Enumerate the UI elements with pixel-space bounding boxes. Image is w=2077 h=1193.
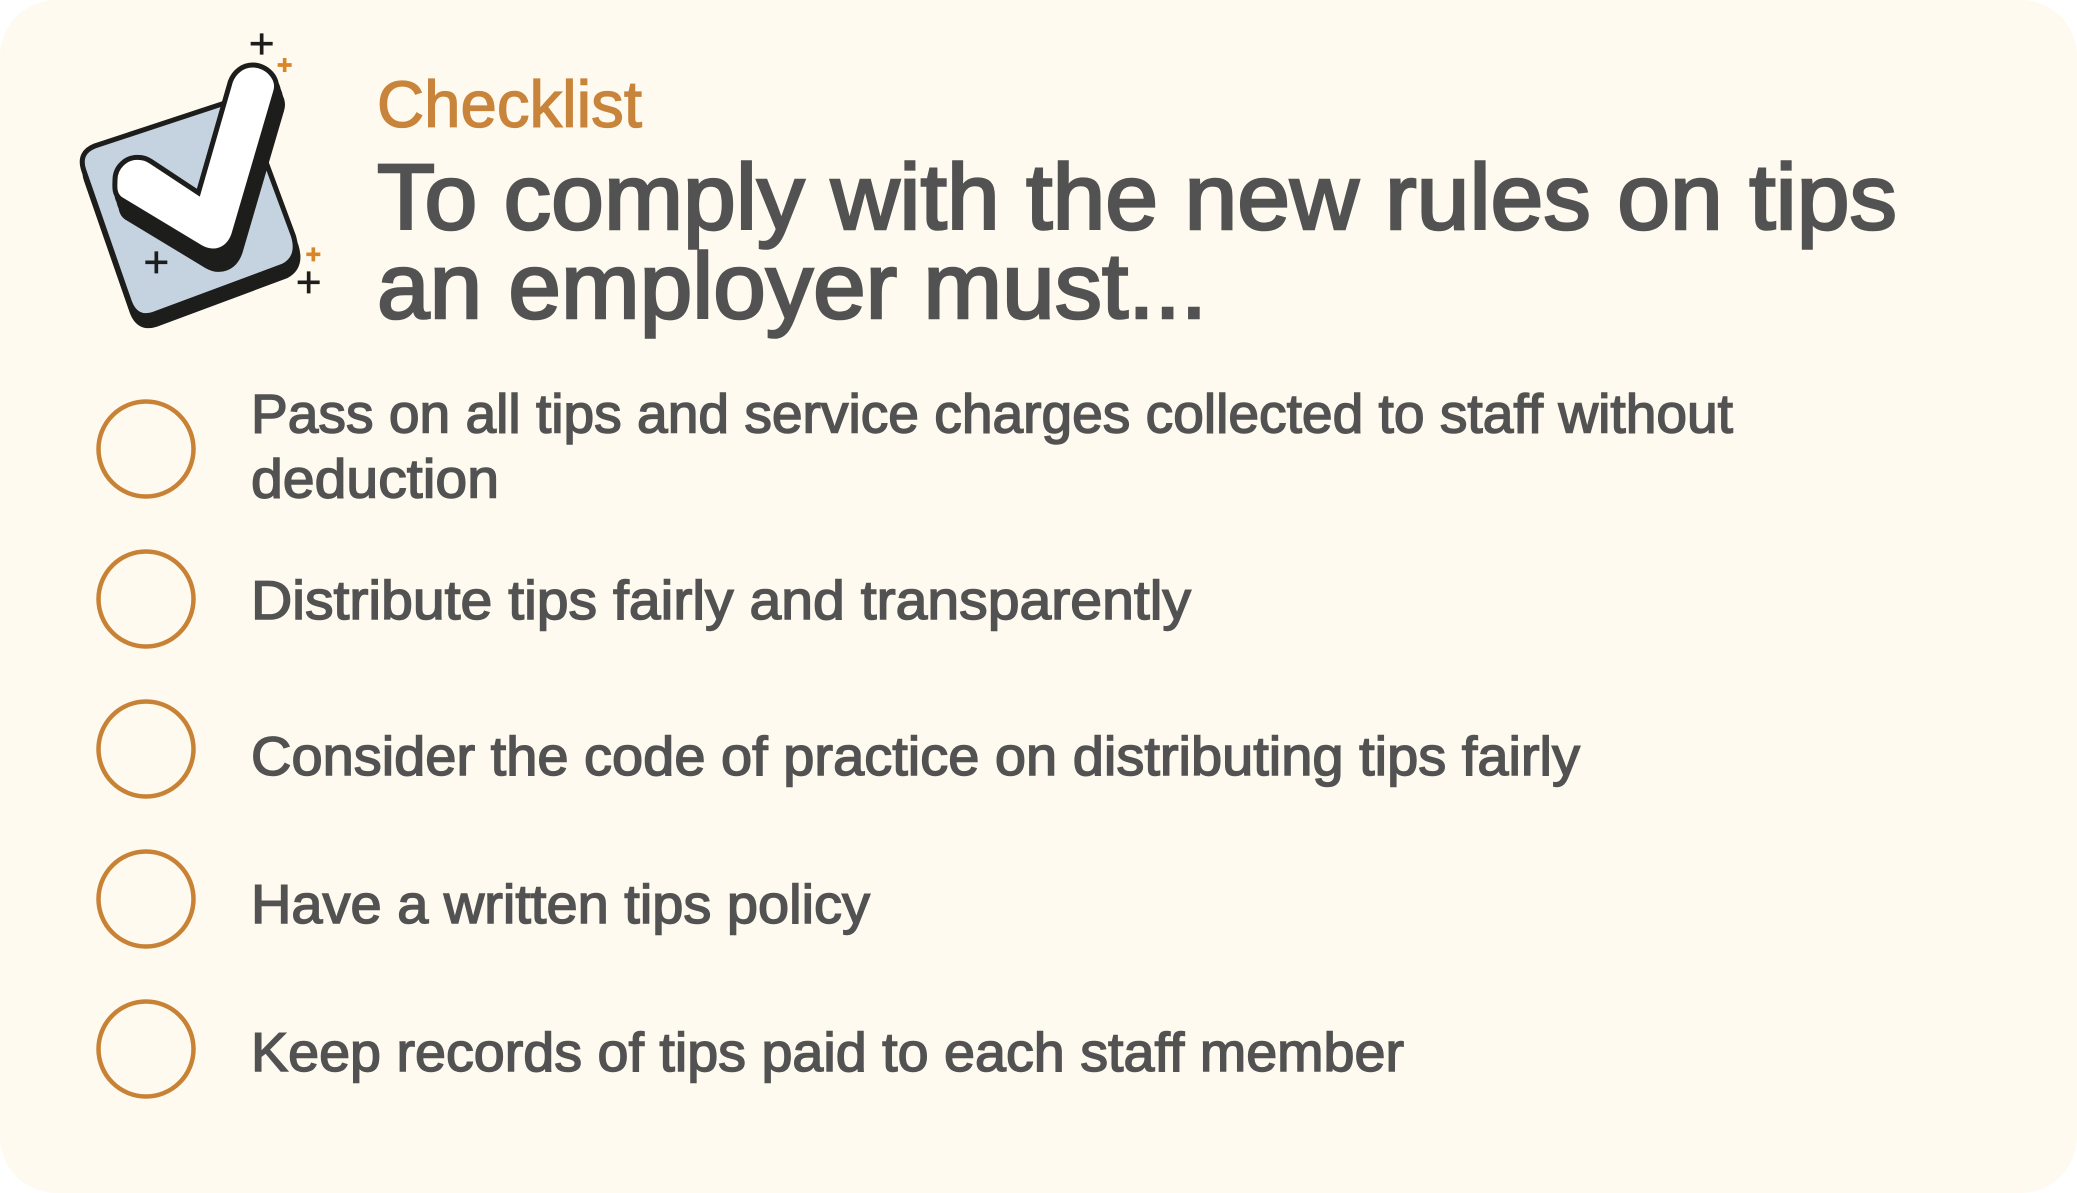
checklist item 3: Consider the code of practice on distributing tips fairly bbox=[251, 725, 1581, 787]
checklist item 1: deduction bbox=[251, 448, 499, 510]
checklist item 5: Keep records of tips paid to each staff member bbox=[251, 1021, 1404, 1083]
checklist item 2: Distribute tips fairly and transparently bbox=[251, 569, 1192, 631]
checklist item 1: Pass on all tips and service charges collected to staff without bbox=[251, 382, 1733, 444]
checklist item 4: Have a written tips policy bbox=[251, 873, 870, 935]
heading: To comply with the new rules on tips bbox=[377, 145, 1897, 249]
checklist item 2 bbox=[98, 552, 1192, 646]
checklist item 3 bbox=[98, 702, 1581, 796]
icon: tick in a box bbox=[82, 33, 320, 326]
label: Checklist: Checklist bbox=[377, 67, 642, 141]
checklist item 1 bbox=[98, 382, 1733, 510]
checklist item 4 bbox=[98, 852, 870, 946]
checklist item 5 bbox=[98, 1002, 1404, 1096]
heading: an employer must... bbox=[377, 234, 1207, 338]
heading bbox=[377, 145, 1897, 338]
